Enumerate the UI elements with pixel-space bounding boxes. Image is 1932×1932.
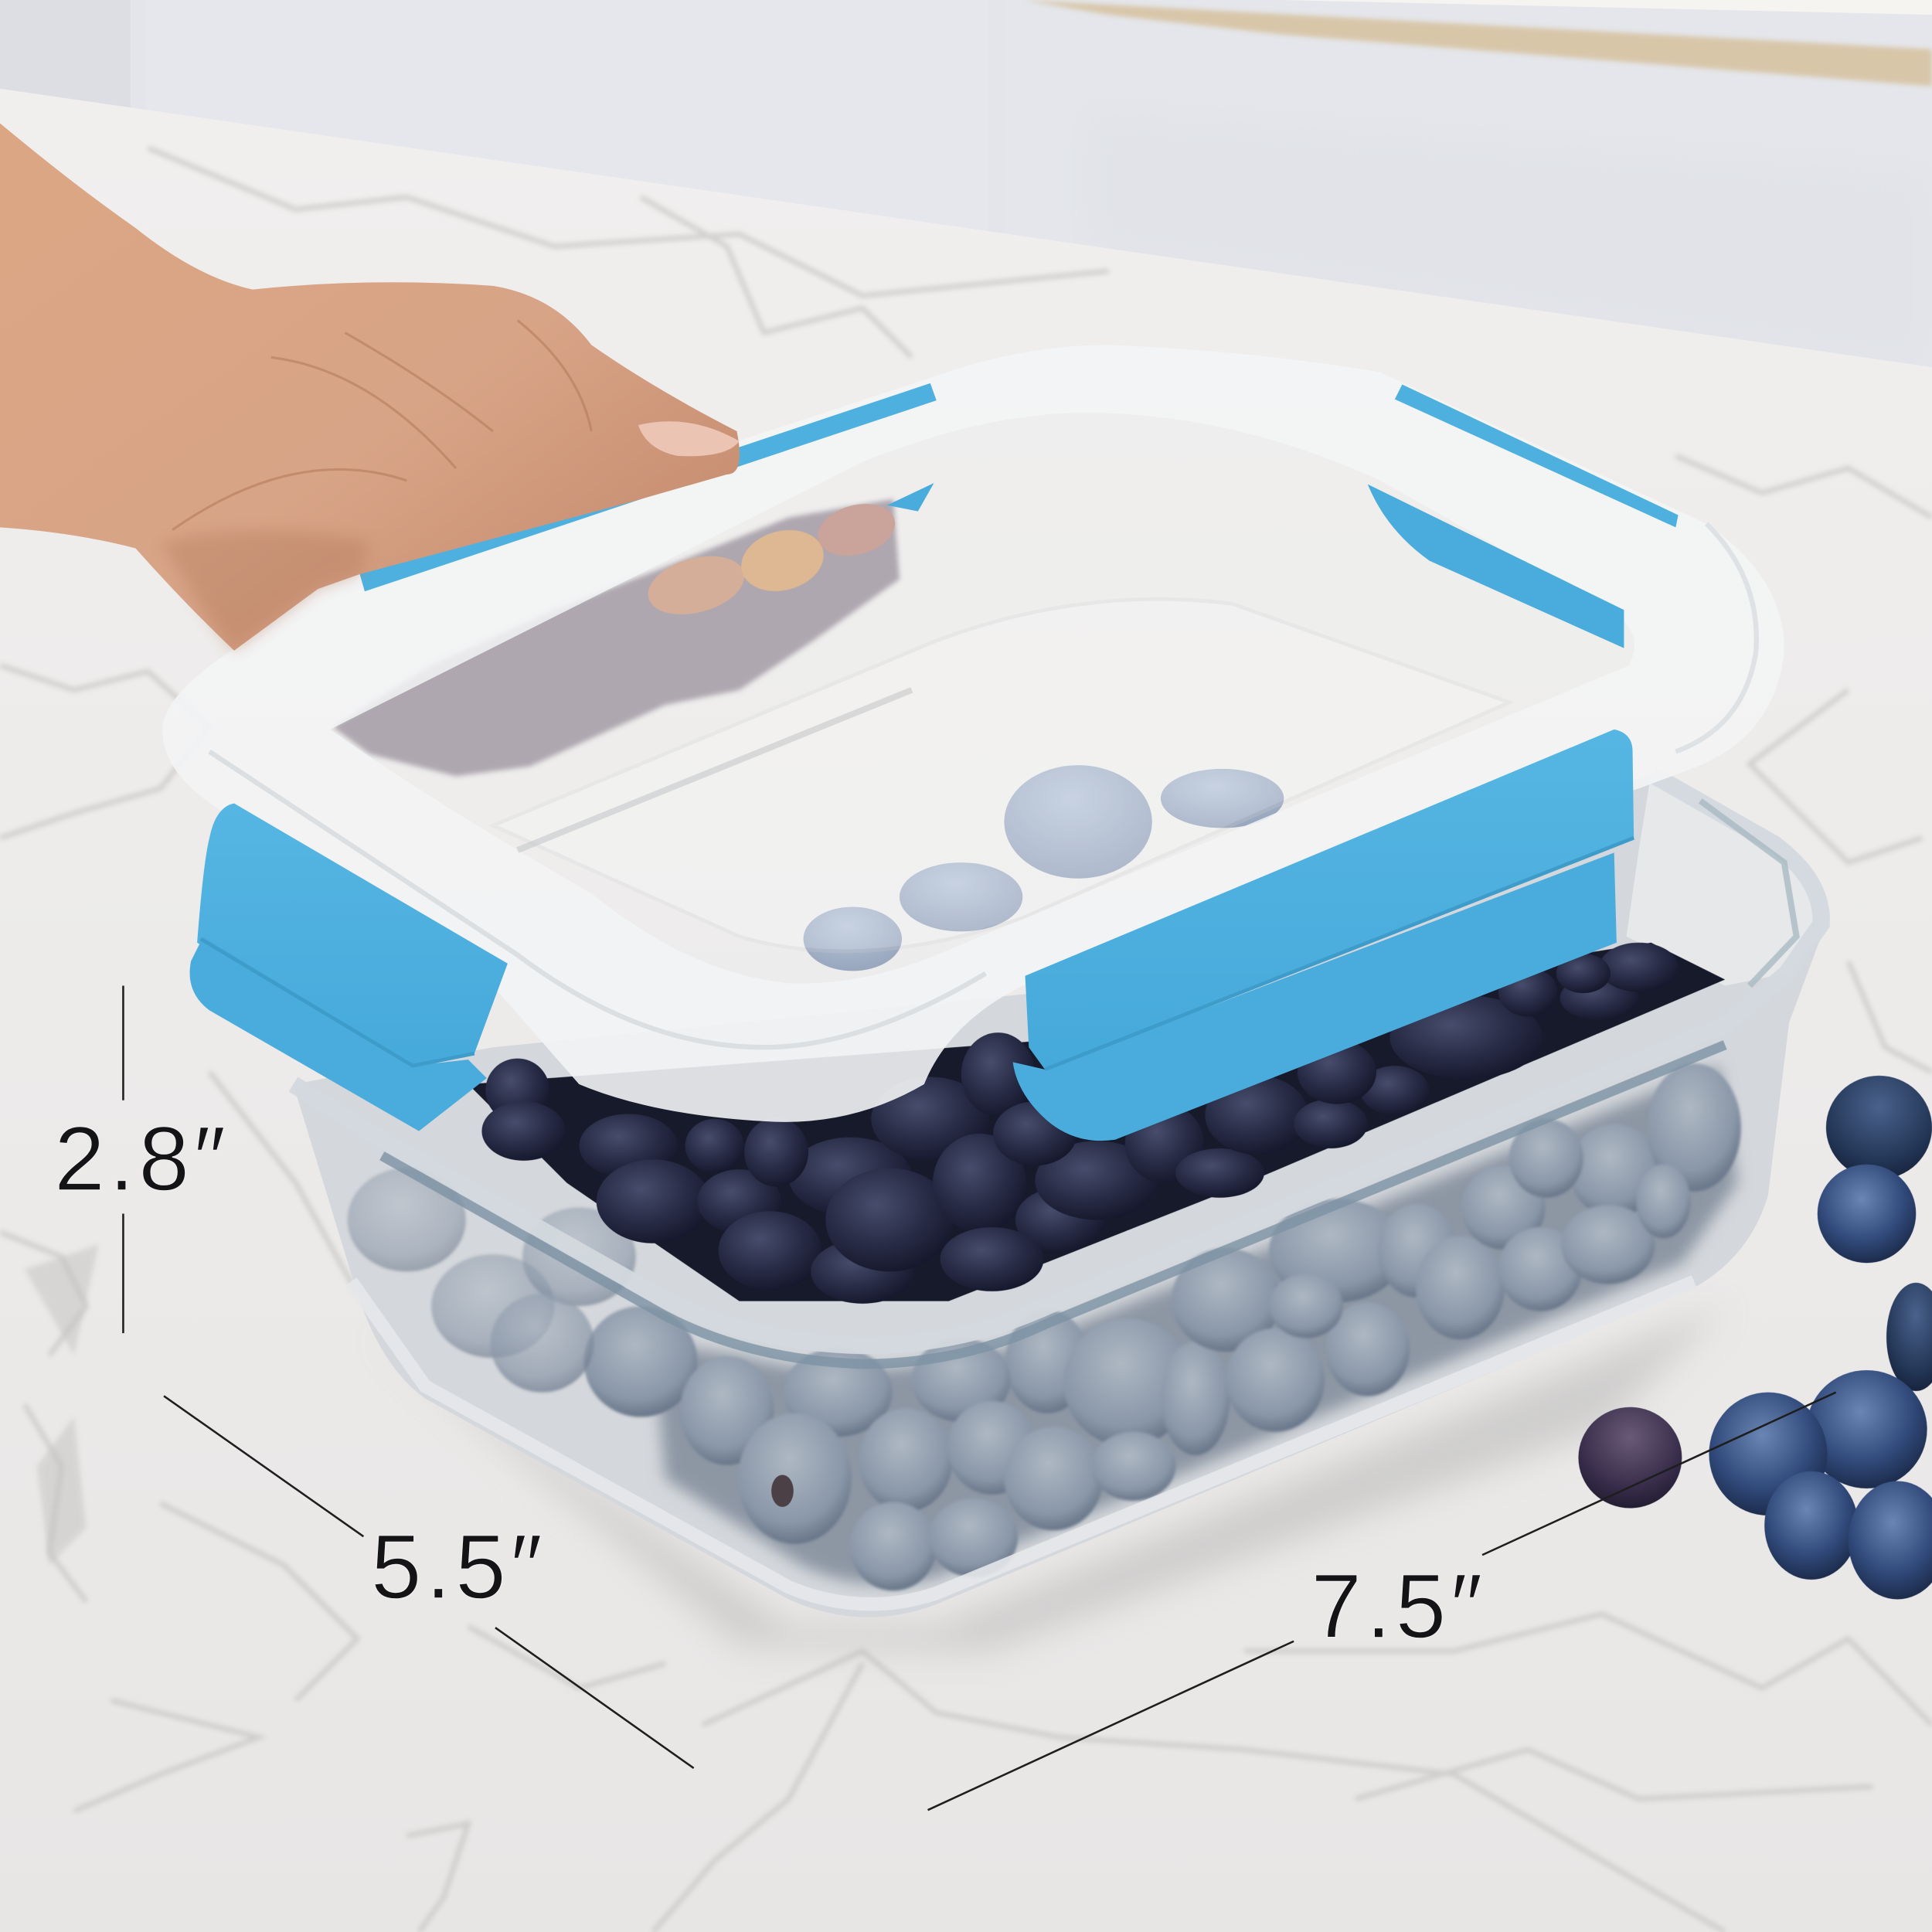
front right crease — [1045, 838, 1634, 1070]
blueberries seen through lid — [804, 765, 1284, 971]
blue locking clips — [190, 383, 1679, 1141]
lid ridge — [209, 752, 986, 1047]
front left clip — [197, 804, 508, 1072]
loose blueberries — [1578, 1076, 1932, 1600]
glass rim — [293, 774, 1821, 1345]
background: kitchen wall — [0, 0, 1932, 394]
dimension: length 7.5 in — [928, 1393, 1836, 1810]
hand holding the lid — [0, 123, 740, 651]
lid window — [330, 413, 1634, 984]
front left flap — [190, 937, 487, 1131]
pale berries seen through glass — [348, 1063, 1741, 1590]
inner tray seen through lid — [493, 599, 1509, 951]
front right flap — [1013, 852, 1617, 1141]
glass body — [293, 774, 1824, 1617]
dimension: width 5.5 in: 5.5″ — [371, 1516, 546, 1618]
back right flap — [1368, 485, 1624, 648]
front right clip — [1026, 730, 1634, 1070]
container shadow — [369, 1306, 1725, 1651]
thumbnail — [638, 421, 740, 456]
back left clip — [360, 383, 937, 591]
hand creases — [172, 321, 591, 530]
dimension: width 5.5 in — [164, 1396, 694, 1768]
glass base — [351, 1281, 1694, 1604]
palm shadow — [160, 530, 369, 651]
dimension: length 7.5 in: 7.5″ — [1311, 1556, 1487, 1658]
glass container — [293, 774, 1824, 1651]
lid frosted frame — [162, 345, 1784, 1122]
glass interior back right — [1627, 774, 1824, 986]
fingers seen through lid — [332, 496, 901, 776]
front left crease — [201, 939, 474, 1066]
back right clip — [1395, 384, 1679, 527]
berry fill behind glass — [653, 1066, 1737, 1584]
berry pit — [771, 1475, 794, 1507]
lid — [162, 345, 1784, 1122]
dark berries above the rim — [468, 943, 1725, 1301]
back left flap — [887, 483, 934, 512]
dimension: height 2.8 in: 2.8″ — [54, 1108, 230, 1210]
